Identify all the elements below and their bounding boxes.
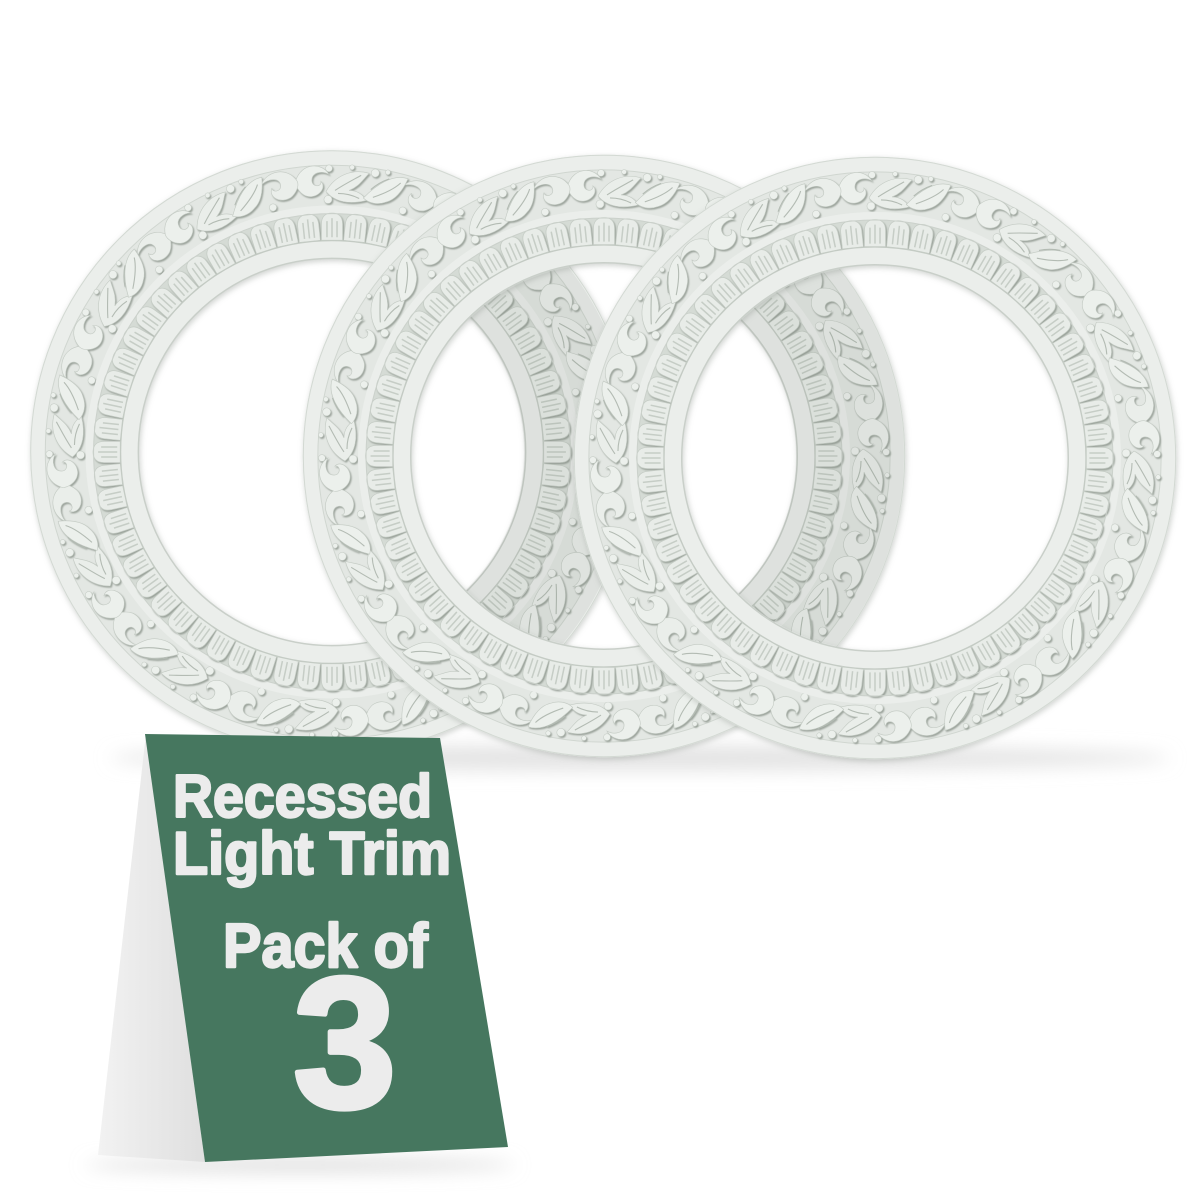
heading: Recessed Light Trim: Recessed: [173, 763, 432, 830]
label: Pack of: Pack of: [223, 912, 428, 981]
ring shade: left trim seen through middle hole: [466, 268, 604, 644]
card side panel: [98, 734, 205, 1162]
ring shade: middle trim seen through right hole: [739, 270, 904, 646]
ring: middle trim: [303, 155, 905, 757]
heading: Recessed Light Trim: [173, 763, 451, 887]
number: 3: 3: [293, 940, 396, 1147]
heading: Recessed Light Trim: Light Trim: [173, 820, 451, 887]
card front panel: [145, 734, 508, 1162]
floor shadow: [110, 746, 1170, 770]
ring: back left trim: [31, 151, 633, 753]
ring: front right trim: [574, 157, 1176, 759]
card shadow: [85, 1159, 515, 1171]
tent card: [98, 734, 508, 1162]
